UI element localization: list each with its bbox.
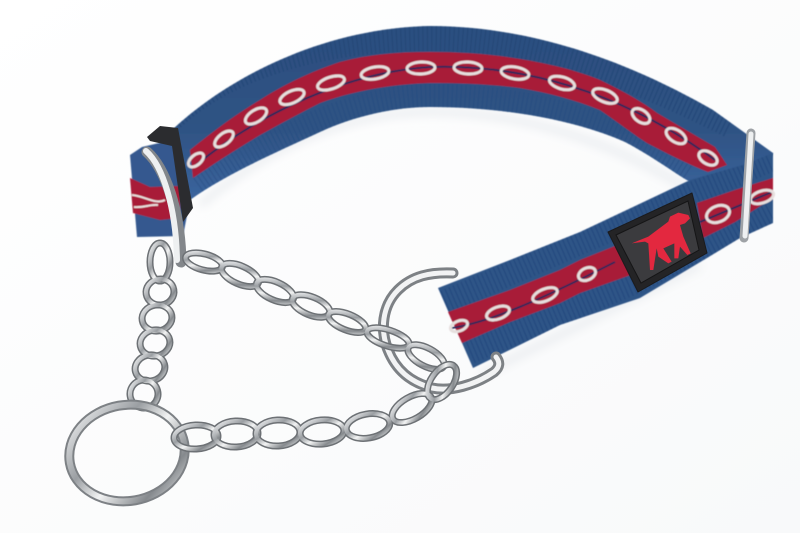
red stripe back	[190, 52, 727, 178]
webbing ribs	[172, 38, 730, 188]
back band webbing	[172, 26, 773, 200]
metal buckle bar right	[744, 133, 751, 238]
front strap chain stitching	[452, 192, 772, 328]
left chain stitching	[132, 195, 165, 207]
rubber dog logo patch	[608, 193, 707, 292]
icon: red dog silhouette	[632, 213, 691, 270]
front strap webbing	[438, 153, 773, 368]
patch body	[608, 193, 707, 292]
upper chain	[184, 249, 448, 374]
silver ring at left strap end	[146, 151, 181, 262]
large O-ring	[62, 396, 192, 510]
white chain links back	[186, 61, 720, 170]
left strap end	[130, 140, 190, 237]
D-ring	[383, 273, 499, 389]
navy chain thread back	[195, 67, 715, 166]
black slider loop	[147, 126, 193, 222]
collar: back band	[172, 26, 773, 200]
left blue webbing	[130, 140, 190, 237]
left red stripe	[130, 178, 180, 220]
bottom chain	[173, 359, 462, 450]
front strap	[438, 153, 775, 368]
left chain	[127, 243, 176, 411]
soft shadows	[200, 112, 700, 375]
front red stripe	[448, 236, 650, 343]
